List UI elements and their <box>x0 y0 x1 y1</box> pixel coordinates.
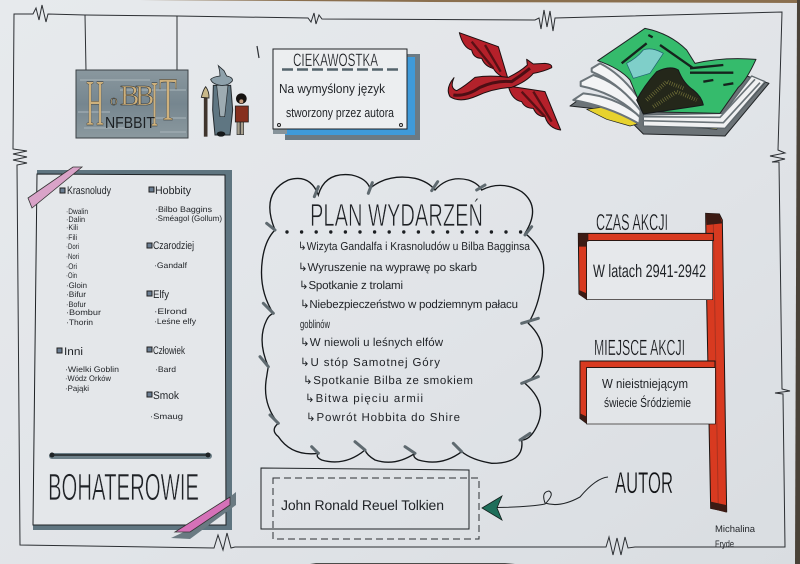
event list: ↳Spotkanie Bilba ze smokiem <box>303 375 473 387</box>
panel: ciekawostka card <box>273 49 420 140</box>
group: krasnoludy: ·Thorin <box>66 318 93 327</box>
group: krasnoludy: ·Nori <box>66 252 79 261</box>
signature <box>715 524 756 550</box>
heading: CIEKAWOSTKA <box>293 50 378 70</box>
hanging sign: Hobbit title <box>76 15 188 141</box>
tape bottom <box>171 492 236 539</box>
body text: Na wymyślony język <box>279 81 385 96</box>
group: krasnoludy: ·Bombur <box>66 308 101 317</box>
icon: open book with map <box>570 28 769 136</box>
event list: ↳Wizyta Gandalfa i Krasnoludów u Bilba Bagginsa <box>298 241 531 253</box>
group: krasnoludy: ·Gloin <box>66 281 87 290</box>
group: inni <box>57 346 119 393</box>
icon: red dragon <box>448 33 561 130</box>
left pages <box>573 63 642 124</box>
group: elfy: Elfy <box>153 289 169 301</box>
sign 1 <box>578 233 713 300</box>
event list: ↳W niewoli u leśnych elfów <box>300 337 444 349</box>
group: smok: ·Smaug <box>150 412 183 421</box>
mountain <box>637 68 703 114</box>
heading: bohaterowie: BOHATEROWIE <box>48 467 199 509</box>
heading: autor: AUTOR <box>615 467 673 500</box>
group: hobbity <box>149 185 222 223</box>
panel: bohaterowie board <box>28 167 236 539</box>
group: krasnoludy <box>60 185 111 327</box>
group: czlowiek: ·Bard <box>155 365 176 374</box>
group: czarodziej <box>147 240 194 270</box>
group: inni: ·Wielki Goblin <box>65 365 119 374</box>
group: inni: ·Wódz Orków <box>65 374 111 383</box>
group: krasnoludy: ·Bofur <box>66 300 86 309</box>
group: krasnoludy: Krasnoludy <box>67 185 111 197</box>
post <box>706 213 727 512</box>
signature: Fryde <box>715 539 734 550</box>
panel: ciekawostka card: stworzony przez autora <box>286 105 395 120</box>
panel bar <box>50 452 210 458</box>
sign 2 <box>580 361 715 424</box>
group: inni: ·Pająki <box>65 384 89 393</box>
event list: ↳Wyruszenie na wyprawę po skarb <box>298 262 477 274</box>
author name: John Ronald Reuel Tolkien <box>281 497 444 513</box>
group: czarodziej: Czarodziej <box>153 240 194 252</box>
group: krasnoludy: ·Dori <box>66 242 79 251</box>
right pages <box>643 76 765 128</box>
event list <box>298 241 531 424</box>
event list: ↳U stóp Samotnej Góry <box>300 357 440 369</box>
panel: plan wydarzen cloud <box>260 175 544 463</box>
illustration: Gandalf and Bilbo <box>201 66 248 137</box>
group: czlowiek: Człowiek <box>153 345 185 357</box>
title: HOBBIT: B <box>120 80 139 112</box>
cloud outline <box>260 175 544 463</box>
event list: ↳Niebezpieczeństwo w podziemnym pałacu <box>300 299 518 311</box>
signpost <box>578 209 727 513</box>
title: HOBBIT: B <box>135 80 154 112</box>
title: HOBBIT: o <box>110 93 118 109</box>
sign text: place <box>602 376 691 410</box>
tape top <box>28 167 82 208</box>
arrow from autor label to box <box>482 477 608 520</box>
decorative tick mark icon <box>257 46 259 58</box>
group: krasnoludy: ·Dalin <box>66 215 85 224</box>
group: elfy: ·Leśne elfy <box>154 317 196 326</box>
label: miejsce akcji: MIEJSCE AKCJI <box>594 335 685 360</box>
map pages <box>598 28 756 113</box>
title: HOBBIT: I <box>151 68 158 141</box>
label: czas akcji: CZAS AKCJI <box>596 209 668 235</box>
group: hobbity: Hobbity <box>155 185 191 197</box>
group: hobbity: ·Bilbo Baggins <box>155 205 212 214</box>
signature: Michalina <box>715 524 756 535</box>
hanging sign: Hobbit title: T <box>159 66 177 134</box>
event list: ↳Bitwa pięciu armii <box>305 393 423 405</box>
event list: ↳Spotkanie z trolami <box>299 280 403 292</box>
group: krasnoludy: ·Ori <box>66 262 77 271</box>
event list: goblinów <box>300 319 330 331</box>
author box <box>261 468 479 539</box>
group: elfy <box>147 289 196 326</box>
sign text: place: W nieistniejącym <box>602 376 688 391</box>
icon: Gandalf <box>201 66 233 137</box>
group: krasnoludy: ·Bifur <box>66 290 86 299</box>
sign text: place: świecie Śródziemie <box>604 395 691 410</box>
group: smok <box>147 390 183 421</box>
group: krasnoludy: ·Kili <box>66 223 78 232</box>
heading: plan wydarzen: PLAN WYDARZEŃ <box>310 197 483 233</box>
sign text: dates: W latach 2941-2942 <box>593 261 706 281</box>
group: smok: Smok <box>153 390 179 402</box>
group: krasnoludy: ·Oin <box>66 271 77 280</box>
icon: Bilbo <box>235 93 248 135</box>
title: HOBBIT: H <box>86 67 104 140</box>
group: krasnoludy: ·Fili <box>66 233 77 242</box>
group: inni: Inni <box>64 346 83 358</box>
group: czlowiek <box>147 345 185 374</box>
group: czarodziej: ·Gandalf <box>154 261 188 270</box>
book cover <box>570 76 769 136</box>
group: krasnoludy: ·Dwalin <box>66 207 88 216</box>
group: elfy: ·Elrond <box>154 307 187 316</box>
event list: ↳Powrót Hobbita do Shire <box>306 412 460 424</box>
group: hobbity: ·Sméagol (Gollum) <box>155 214 222 223</box>
runes subtitle: NFBBIT <box>105 115 155 132</box>
